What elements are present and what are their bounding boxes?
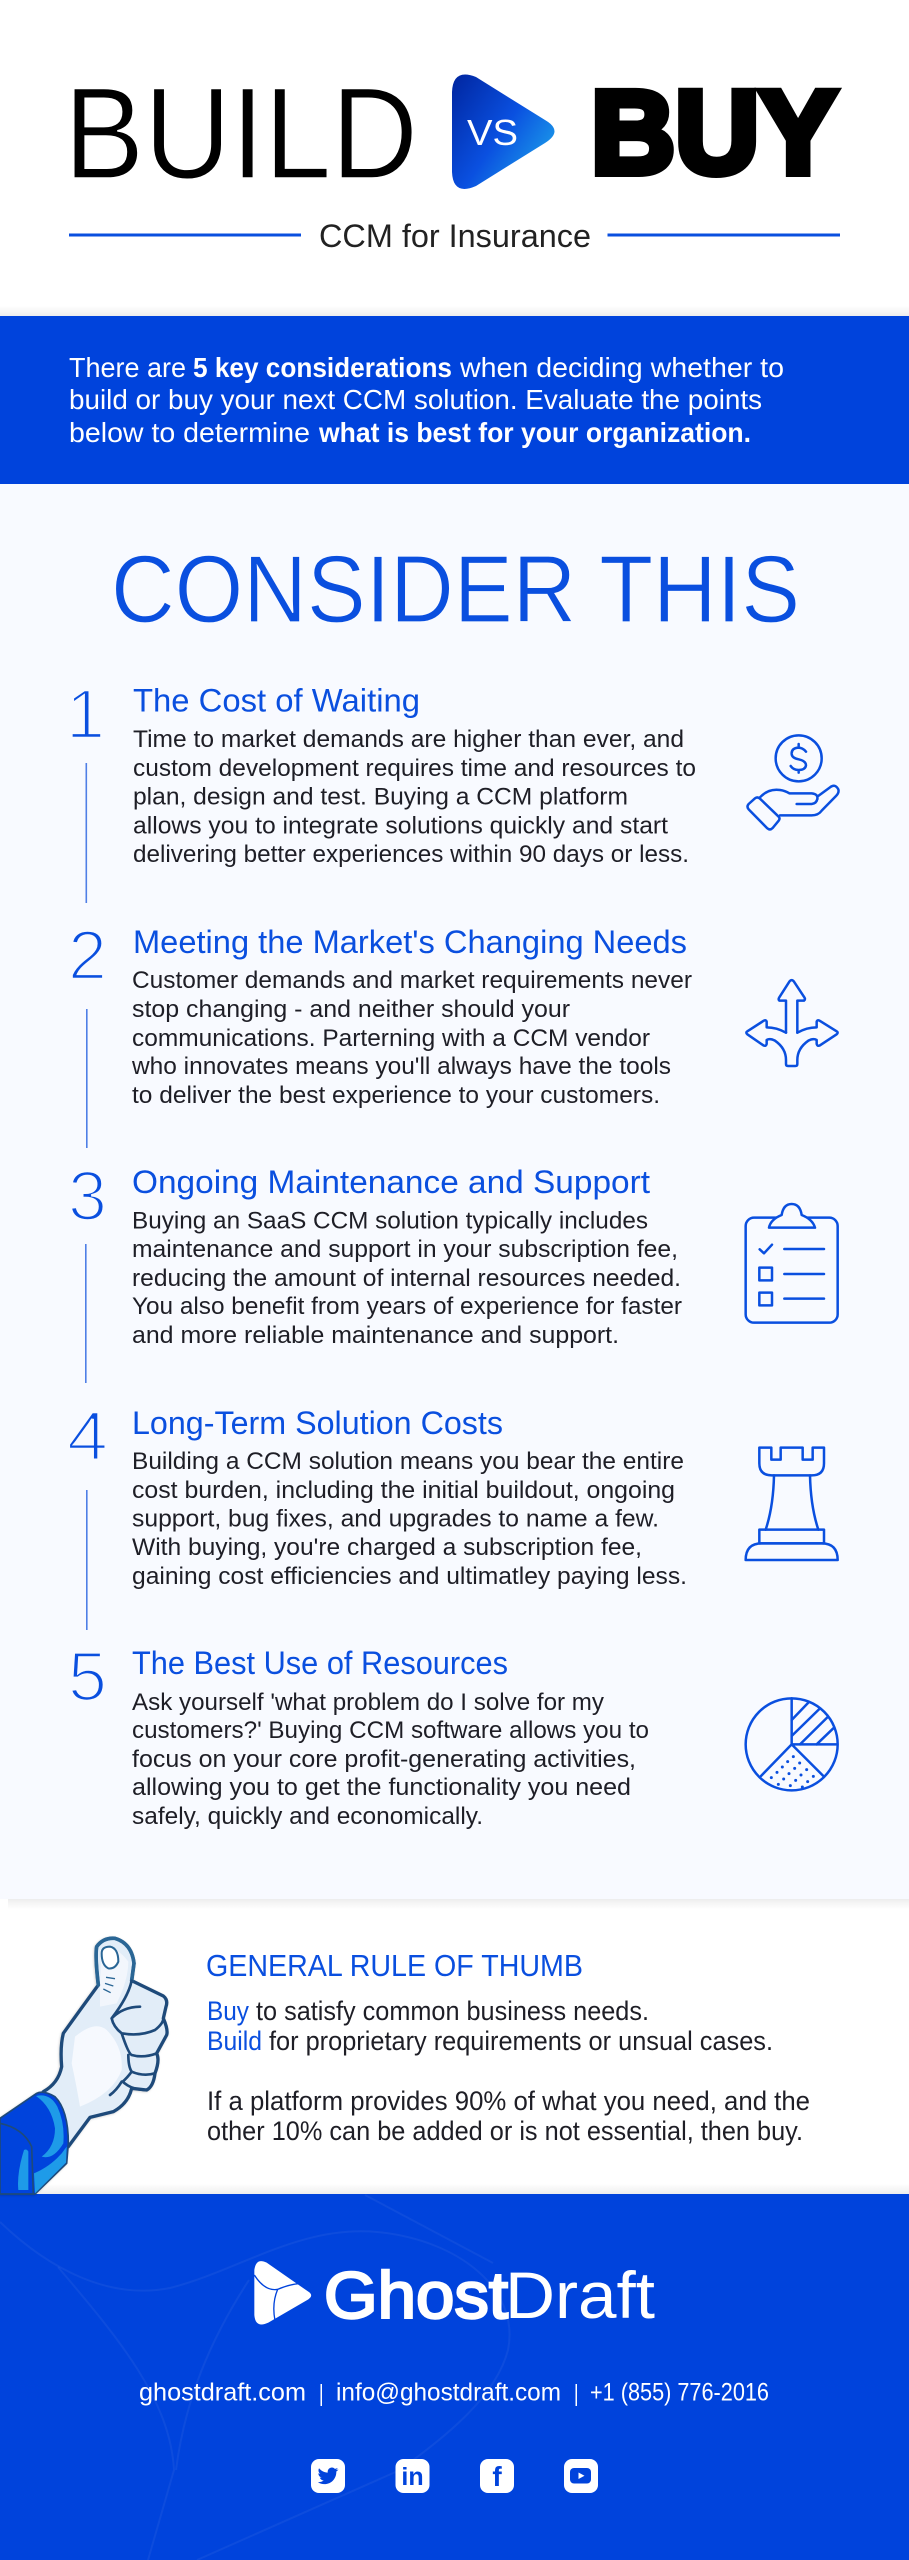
consideration 2 <box>68 916 838 1148</box>
rule text: Buy <box>207 1996 249 2026</box>
body 2 <box>131 967 692 1109</box>
contact details <box>139 2378 769 2406</box>
body 4: With buying, you're charged a subscription fee, <box>132 1534 642 1561</box>
intro text: what is best for your organization. <box>318 417 751 448</box>
body 3: reducing the amount of internal resources needed. <box>132 1265 681 1292</box>
title 3: Ongoing Maintenance and Support <box>132 1164 650 1200</box>
subtitle with rules <box>69 218 840 254</box>
logo: ghostdraft <box>254 2258 655 2332</box>
title 5: The Best Use of Resources <box>132 1645 508 1681</box>
icon: linkedin <box>396 2459 430 2493</box>
number 1: 1 <box>66 675 105 753</box>
body 2: who innovates means you'll always have the tools <box>131 1053 671 1080</box>
number 3: 3 <box>68 1157 107 1235</box>
logo wordmark <box>324 2258 655 2332</box>
logo wordmark: Draft <box>505 2258 655 2332</box>
body 4: Building a CCM solution means you bear the entire <box>132 1448 684 1475</box>
icon: linkedin: in <box>401 2463 424 2491</box>
icon: vs play triangle <box>452 75 554 189</box>
rule text: If a platform provides 90% of what you need, and the <box>207 2086 810 2116</box>
body 4: gaining cost efficiencies and ultimatley paying less. <box>132 1563 687 1590</box>
body 5: Ask yourself 'what problem do I solve for my <box>132 1689 604 1716</box>
illustration: thumbs up hand <box>0 1938 167 2194</box>
intro text: There are <box>69 352 186 383</box>
rule text: for proprietary requirements or unsual cases. <box>269 2026 773 2056</box>
body 5 <box>132 1689 649 1830</box>
body 1: plan, design and test. Buying a CCM platform <box>133 784 628 810</box>
body 5: allowing you to get the functionality you need <box>132 1774 631 1801</box>
icon: pie chart <box>746 1698 838 1790</box>
body 3: maintenance and support in your subscription fee, <box>132 1236 678 1263</box>
icon: clipboard checklist <box>746 1204 838 1323</box>
body 1: custom development requires time and resources to <box>133 755 696 782</box>
body 3: You also benefit from years of experience for faster <box>132 1293 682 1320</box>
intro text: when deciding whether to <box>459 352 784 383</box>
heading: general rule of thumb: GENERAL RULE OF THUMB <box>206 1948 583 1983</box>
heading: consider this: CONSIDER THIS <box>111 536 800 643</box>
panel: consider this <box>0 484 909 1899</box>
body 4: support, bug fixes, and upgrades to name a few. <box>132 1506 659 1532</box>
title 1: The Cost of Waiting <box>133 682 420 718</box>
rule text: other 10% can be added or is not essential, then buy. <box>207 2116 803 2146</box>
intro text: 5 key considerations <box>193 352 452 383</box>
icon: twitter <box>311 2459 345 2493</box>
icon: youtube <box>564 2459 598 2493</box>
intro text: build or buy your next CCM solution. Evaluate the points <box>69 384 762 415</box>
body 5: customers?' Buying CCM software allows you to <box>132 1717 649 1744</box>
icon: chess rook <box>746 1448 838 1560</box>
body 1 <box>133 726 696 868</box>
intro text: below to determine <box>69 417 310 448</box>
body 1: allows you to integrate solutions quickly and start <box>133 812 668 840</box>
intro text <box>69 352 784 448</box>
rule text <box>207 1996 810 2146</box>
number 4: 4 <box>67 1397 108 1475</box>
body 2: communications. Parterning with a CCM vendor <box>132 1025 650 1052</box>
social icons <box>311 2459 598 2493</box>
panel: intro band <box>0 316 909 484</box>
logo mark <box>254 2261 311 2324</box>
icon: facebook: f <box>492 2461 502 2492</box>
body 5: focus on your core profit-generating activities, <box>132 1746 636 1773</box>
header: build vs buy title <box>64 60 837 206</box>
body 2: to deliver the best experience to your customers. <box>132 1082 660 1109</box>
number 5: 5 <box>68 1638 107 1716</box>
icon: vs play triangle: VS <box>467 112 518 153</box>
consideration 5 <box>68 1638 838 1830</box>
contact details: info@ghostdraft.com <box>336 2378 561 2406</box>
title 4: Long-Term Solution Costs <box>132 1405 503 1441</box>
body 5: safely, quickly and economically. <box>132 1803 483 1830</box>
body 3: and more reliable maintenance and support. <box>132 1322 619 1349</box>
body 4 <box>132 1448 687 1590</box>
logo wordmark: Ghost <box>324 2258 508 2332</box>
title word: BUILD: BUILD <box>64 60 418 206</box>
body 3: Buying an SaaS CCM solution typically includes <box>132 1208 648 1234</box>
body 1: delivering better experiences within 90 days or less. <box>133 841 689 868</box>
icon: facebook <box>480 2459 514 2493</box>
subtitle with rules: CCM for Insurance <box>319 218 591 254</box>
body 3 <box>132 1208 682 1349</box>
rule text: to satisfy common business needs. <box>256 1996 649 2026</box>
icon: hand holding coin <box>747 735 839 829</box>
body 2: stop changing - and neither should your <box>132 996 570 1023</box>
body 4: cost burden, including the initial buildout, ongoing <box>132 1477 675 1504</box>
panel: footer <box>0 2194 909 2560</box>
rule text: Build <box>207 2026 262 2056</box>
contact details: ghostdraft.com <box>139 2378 306 2406</box>
body 1: Time to market demands are higher than ever, and <box>133 726 684 753</box>
icon: three-way arrows <box>746 980 838 1066</box>
title 2: Meeting the Market's Changing Needs <box>133 924 687 960</box>
consideration 1 <box>66 675 839 903</box>
number 2: 2 <box>68 916 107 994</box>
consideration 3 <box>68 1157 838 1383</box>
contact details: +1 (855) 776-2016 <box>590 2378 769 2406</box>
consideration 4 <box>67 1397 838 1630</box>
body 2: Customer demands and market requirements never <box>132 967 692 994</box>
panel: general rule of thumb <box>206 1948 810 2146</box>
title word: BUY: BUY <box>591 67 837 199</box>
